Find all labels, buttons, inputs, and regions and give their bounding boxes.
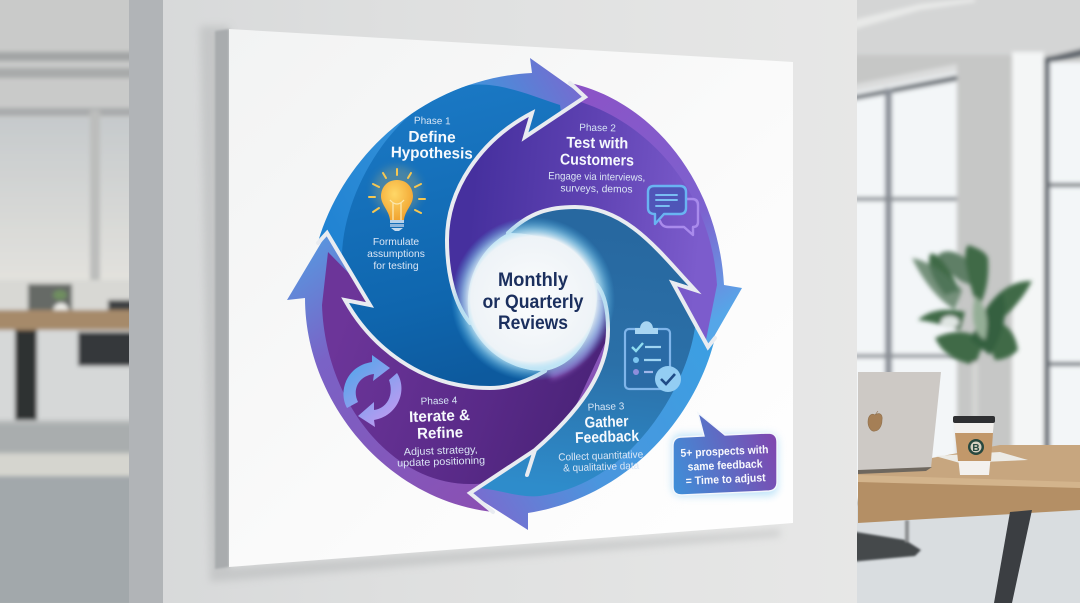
phase 1 text: heading: Hypothesis	[391, 144, 473, 163]
table leg	[994, 510, 1032, 603]
phase 2 text: surveys, demos	[560, 183, 633, 196]
phase 4 text: Refine	[417, 424, 464, 443]
apple logo	[868, 411, 882, 431]
phase 3 segment: gather feedback	[473, 209, 714, 530]
phase 1 text: heading: Phase 1	[414, 116, 451, 127]
phase 1 text: description: assumptions	[367, 249, 425, 260]
icon: light bulb	[369, 166, 425, 231]
paper under cup	[935, 452, 1028, 463]
white board panel	[229, 29, 793, 567]
phase 1 text: description	[367, 237, 425, 272]
white dividers	[318, 83, 715, 512]
table	[858, 445, 1080, 523]
wall pillar edge	[129, 0, 163, 603]
callout text	[680, 444, 770, 488]
phase 1 text: description: for testing	[373, 261, 419, 272]
callout text: = Time to adjust	[685, 472, 766, 488]
centre hub	[451, 217, 615, 381]
blurred office scene, right	[845, 0, 1080, 603]
phase 3 text: Phase 3	[588, 401, 625, 414]
icon: chat bubbles	[648, 186, 698, 235]
phase 1 text: heading: Define	[408, 129, 456, 146]
centre title: or Quarterly	[482, 292, 584, 313]
board shadow	[200, 26, 780, 582]
icon: refresh arrows	[343, 355, 401, 427]
phase 1 text: heading	[391, 115, 473, 163]
coffee cup: B	[972, 443, 980, 454]
phase 4 segment: iterate and refine	[287, 236, 606, 512]
phase 2 segment: test with customers	[440, 78, 745, 350]
phase 4 text	[395, 394, 486, 470]
icon: clipboard checklist	[625, 321, 681, 392]
centre title: Monthly	[498, 270, 568, 291]
phase 4 text: update positioning	[397, 455, 486, 470]
cycle diagram	[280, 55, 750, 535]
phase 4 text: Adjust strategy,	[404, 445, 478, 458]
phase 3 text: Collect quantitative	[558, 450, 644, 464]
phase 1 text: description: Formulate	[373, 237, 419, 248]
laptop	[858, 372, 941, 474]
callout text: 5+ prospects with	[680, 444, 769, 460]
blurred office scene, left	[0, 0, 134, 603]
phase 3 text: Gather	[584, 413, 629, 432]
coffee cup	[953, 416, 995, 475]
phase 1 segment: define hypothesis	[318, 58, 582, 386]
floor	[850, 505, 1080, 603]
chair	[850, 520, 921, 562]
phase 3 text: & qualitative data	[563, 461, 640, 474]
callout: 5+ prospects	[672, 413, 778, 496]
phase 3 text: Feedback	[575, 428, 640, 447]
phase 2 text	[548, 122, 646, 196]
callout text: same feedback	[687, 458, 763, 474]
phase 3 text	[556, 401, 644, 475]
phase 2 text: Engage via interviews,	[548, 171, 645, 184]
phase 4 text: Iterate &	[409, 407, 470, 426]
plant	[912, 245, 1032, 422]
phase 2 text: Test with	[566, 134, 628, 153]
phase 2 text: Phase 2	[579, 123, 616, 134]
centre title: Reviews	[498, 313, 568, 334]
centre title	[482, 270, 584, 334]
phase 2 text: Customers	[560, 151, 634, 170]
phase 4 text: Phase 4	[420, 395, 458, 408]
